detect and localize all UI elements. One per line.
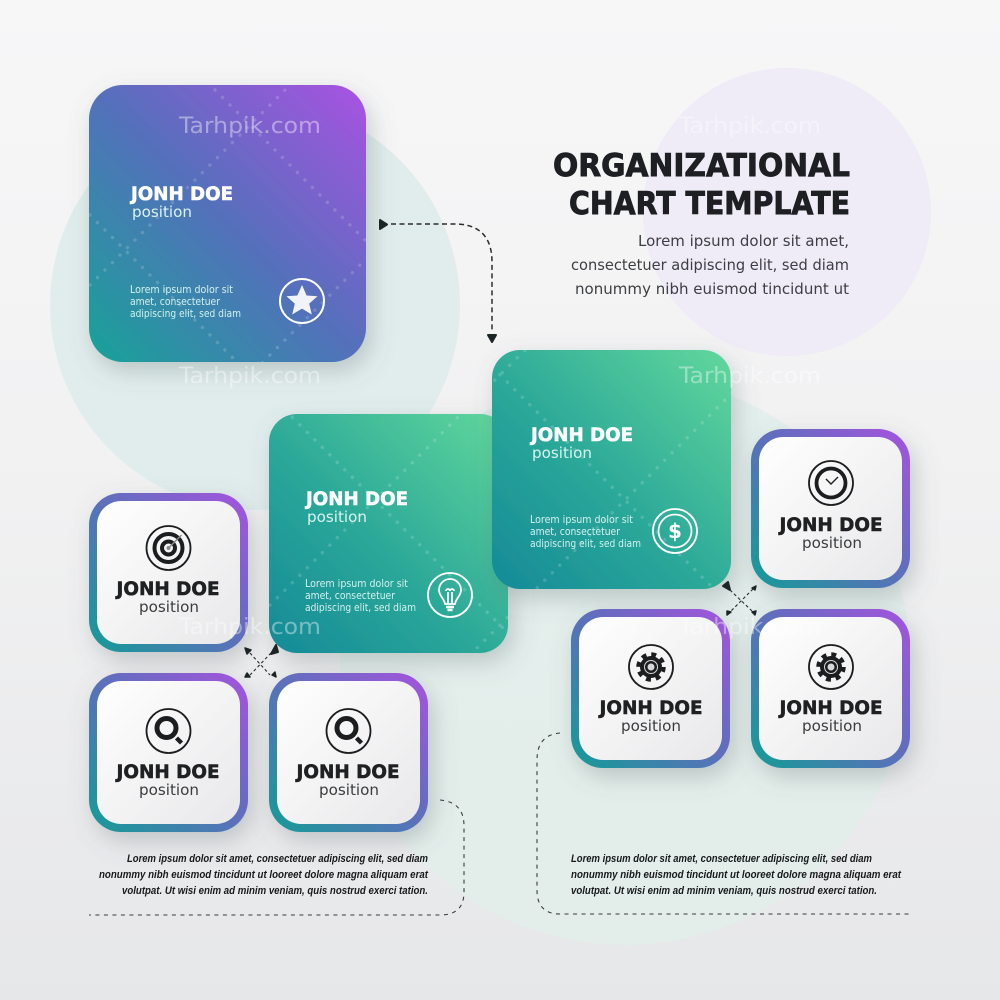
icon: dollar coin — [653, 509, 697, 553]
description: amet, consectetuer — [530, 526, 621, 538]
name: JONH DOE — [598, 697, 703, 719]
position: position — [132, 203, 192, 221]
title: CHART TEMPLATE — [569, 186, 850, 222]
icon: target — [146, 526, 190, 570]
description: Lorem ipsum dolor sit — [130, 284, 233, 296]
arrow: left cross connector — [245, 645, 278, 677]
description: Lorem ipsum dolor sit — [530, 514, 633, 526]
position: position — [621, 717, 681, 735]
position: position — [802, 717, 862, 735]
description: Lorem ipsum dolor sit — [305, 578, 408, 590]
name: JONH DOE — [304, 488, 408, 510]
background circle: right lavender — [643, 68, 931, 356]
watermark lattice — [89, 88, 731, 650]
watermark text — [178, 114, 821, 640]
watermark text: Tarhpik.com — [678, 114, 821, 139]
position: position — [319, 781, 379, 799]
panel: small card target — [89, 493, 248, 652]
note text: left: Lorem ipsum dolor sit amet, consectetuer adipiscing elit, sed diam — [127, 853, 428, 865]
arrow: top connector — [380, 220, 496, 342]
name: JONH DOE — [295, 761, 400, 783]
panel: green card lower — [269, 414, 508, 653]
watermark text: Tarhpik.com — [678, 364, 821, 389]
background circle: left mint — [50, 100, 460, 510]
subtitle text — [571, 232, 849, 298]
description: adipiscing elit, sed diam — [305, 602, 416, 614]
panel: top purple card — [89, 85, 366, 362]
name: JONH DOE — [778, 697, 883, 719]
note text: left: volutpat. Ut wisi enim ad minim veniam, quis nostrud exerci tation. — [122, 885, 428, 897]
subtitle text: consectetuer adipiscing elit, sed diam — [571, 256, 849, 274]
title: ORGANIZATIONAL — [553, 148, 850, 184]
description — [530, 514, 641, 550]
name: JONH DOE — [778, 514, 883, 536]
name: JONH DOE — [129, 183, 233, 205]
watermark text: Tarhpik.com — [678, 615, 821, 640]
position: position — [532, 444, 592, 462]
watermark text: Tarhpik.com — [178, 114, 321, 139]
icon: gear — [809, 645, 853, 689]
position: position — [139, 598, 199, 616]
dashed bracket: right — [537, 733, 912, 914]
name: JONH DOE — [115, 578, 220, 600]
description: adipiscing elit, sed diam — [530, 538, 641, 550]
watermark text: Tarhpik.com — [178, 615, 321, 640]
note text: left: nonummy nibh euismod tincidunt ut looreet dolore magna aliquam erat — [99, 869, 428, 881]
position: position — [307, 508, 367, 526]
title — [553, 148, 850, 222]
description — [305, 578, 416, 614]
icon: light bulb — [428, 573, 472, 617]
panel: small card clock — [751, 429, 910, 588]
description: amet, consectetuer — [305, 590, 396, 602]
panel: small card search left — [89, 673, 248, 832]
position: position — [802, 534, 862, 552]
note text: right: nonummy nibh euismod tincidunt ut looreet dolore magna aliquam erat — [571, 869, 901, 881]
icon: dollar coin: $ — [668, 519, 682, 543]
panel: green card upper — [492, 350, 731, 589]
arrow: right cross connector — [723, 582, 756, 615]
description — [130, 284, 241, 320]
watermark text: Tarhpik.com — [178, 364, 321, 389]
description: adipiscing elit, sed diam — [130, 308, 241, 320]
background circle: bottom mint — [340, 375, 910, 945]
name: JONH DOE — [529, 424, 633, 446]
name: JONH DOE — [115, 761, 220, 783]
icon: star — [280, 279, 324, 323]
icon: magnifier — [146, 709, 190, 753]
note text: right: Lorem ipsum dolor sit amet, consectetuer adipiscing elit, sed diam — [571, 853, 872, 865]
subtitle text: nonummy nibh euismod tincidunt ut — [575, 280, 849, 298]
note text: left — [99, 853, 428, 897]
note text: right — [571, 853, 901, 897]
dashed bracket: left — [89, 800, 464, 915]
subtitle text: Lorem ipsum dolor sit amet, — [638, 232, 849, 250]
icon: gear — [629, 645, 673, 689]
note text: right: volutpat. Ut wisi enim ad minim veniam, quis nostrud exerci tation. — [571, 885, 877, 897]
position: position — [139, 781, 199, 799]
panel: small card gear left — [571, 609, 730, 768]
icon: magnifier — [326, 709, 370, 753]
panel: small card gear right — [751, 609, 910, 768]
icon: clock — [809, 461, 853, 505]
panel: small card search right — [269, 673, 428, 832]
description: amet, consectetuer — [130, 296, 221, 308]
